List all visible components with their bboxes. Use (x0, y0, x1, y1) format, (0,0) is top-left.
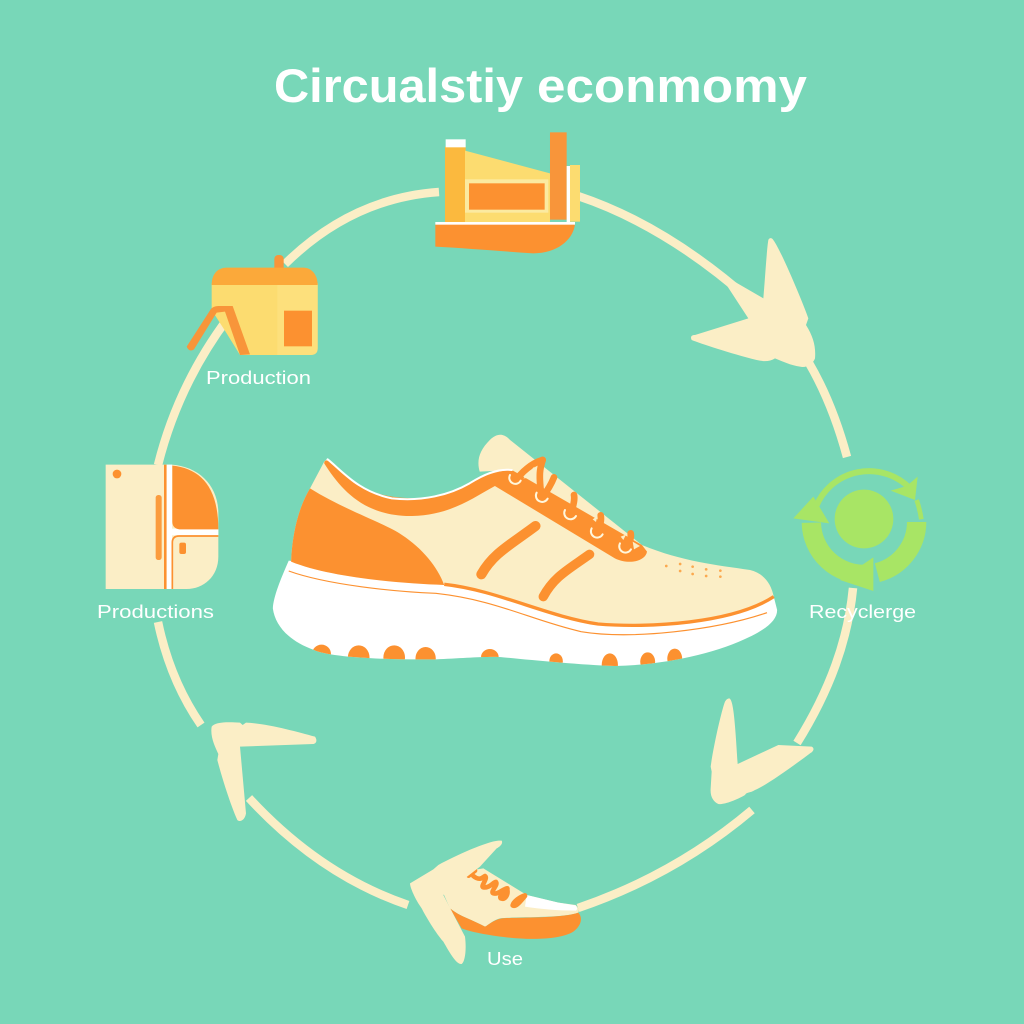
central sneaker (273, 435, 777, 677)
side stripes (481, 526, 535, 574)
sneaker upper (291, 458, 774, 625)
collar band (324, 461, 647, 562)
collar highlight (328, 459, 512, 499)
icon: use shoe with arrow (410, 841, 581, 964)
sneaker tongue (478, 435, 642, 545)
arrow: bottom (410, 841, 502, 964)
label: Productions: Productions (97, 602, 214, 622)
label: Production: Production (206, 368, 311, 388)
sole stripe (444, 584, 774, 625)
sneaker heel panel (291, 488, 444, 585)
small shoe laces (469, 871, 525, 906)
small shoe upper (443, 868, 579, 927)
label: Recyclerge: Recyclerge (809, 602, 916, 622)
infographic canvas (98, 68, 926, 965)
circular ring arcs (158, 192, 853, 908)
sneaker sole (273, 561, 777, 666)
small shoe sole (450, 908, 581, 939)
title: econmomy (537, 59, 807, 112)
icon: house workshop (187, 255, 318, 355)
small shoe lining (525, 895, 577, 911)
title (274, 59, 807, 112)
sole thin line (289, 571, 767, 635)
arrow: lower left (211, 722, 316, 821)
factory base (435, 224, 575, 253)
icon: recycling symbol (793, 471, 921, 591)
icon: factory (435, 132, 580, 253)
sneaker body (273, 435, 777, 677)
arrow: lower right (711, 698, 813, 804)
sole lugs (313, 644, 682, 666)
toe perforations (665, 563, 722, 578)
laces (509, 460, 640, 553)
small shoe (443, 868, 581, 939)
label: Use: Use (487, 949, 523, 969)
arrow: top right (691, 238, 815, 367)
title: Circualstiy (274, 59, 523, 112)
icon: production door unit (106, 465, 218, 589)
